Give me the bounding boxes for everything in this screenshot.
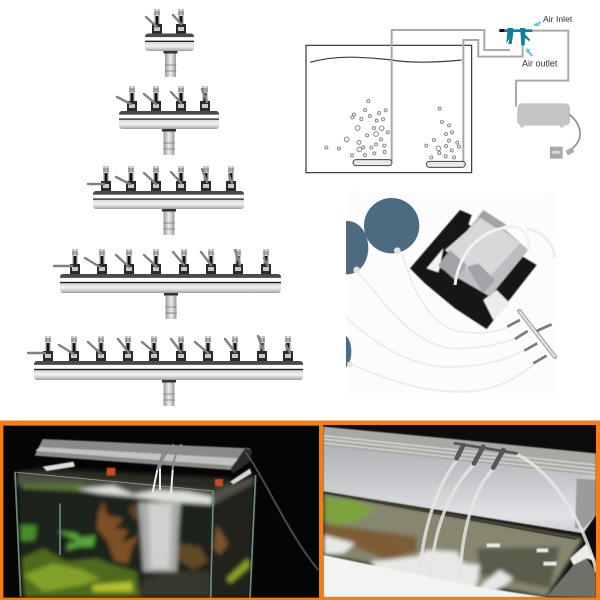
background bbox=[346, 192, 556, 395]
green algae patch bbox=[323, 497, 375, 527]
teal manifold bbox=[499, 28, 532, 45]
bottom orange band bbox=[0, 420, 600, 600]
black air line bbox=[245, 452, 318, 570]
label: Air outlet: Air outlet bbox=[522, 58, 558, 68]
manifold: 6-way valve bbox=[88, 166, 244, 235]
green surface reflection bbox=[20, 483, 83, 491]
metal valves bbox=[455, 443, 517, 468]
foam at surface bbox=[77, 486, 212, 504]
air stones bbox=[353, 160, 465, 167]
manifold: 8-way valve bbox=[54, 249, 281, 319]
bubble curtain bbox=[138, 502, 181, 572]
photo: aquarium with bubble curtain bbox=[3, 426, 319, 598]
pump body bbox=[438, 210, 528, 297]
tank rim surface bbox=[17, 472, 255, 504]
plants bbox=[57, 531, 95, 550]
white foam bbox=[323, 535, 513, 592]
brown reflection bbox=[323, 523, 417, 560]
driftwood bbox=[97, 501, 140, 563]
dark surface area bbox=[477, 547, 560, 588]
water surface bbox=[323, 492, 583, 597]
moss carpet bbox=[22, 548, 140, 598]
manifold: 2-way valve bbox=[145, 9, 194, 77]
air tubes bbox=[347, 228, 555, 392]
rail highlights bbox=[323, 436, 596, 473]
dark gear behind the lid bbox=[17, 468, 233, 491]
mini manifold bbox=[507, 311, 555, 363]
photo: close-up of valves on tank lid bbox=[323, 425, 597, 597]
bubbles bbox=[325, 99, 460, 159]
pump coil blocks bbox=[438, 210, 507, 293]
dark frame line bbox=[323, 492, 577, 539]
foam spots bbox=[487, 543, 557, 566]
tank back interior bbox=[17, 482, 213, 598]
stone connectors bbox=[347, 247, 401, 367]
diagram: aquarium air connection bbox=[306, 14, 580, 173]
light hood bbox=[35, 439, 251, 470]
manifold: 10-way valve bbox=[28, 336, 303, 406]
photo: air pump with stones and tubes bbox=[346, 198, 558, 393]
glass edges bbox=[15, 472, 256, 598]
power cord and socket bbox=[550, 114, 580, 159]
front tube loop bbox=[455, 227, 529, 285]
lamp tube bbox=[323, 446, 596, 533]
clear tubes bbox=[420, 454, 597, 578]
frame window right bbox=[483, 290, 510, 320]
glass front edge bbox=[323, 555, 547, 597]
air stones bbox=[346, 198, 420, 368]
frame window left bbox=[427, 248, 443, 272]
air tubes bbox=[392, 30, 568, 163]
tank outline bbox=[306, 45, 472, 173]
lamp rail bbox=[323, 427, 596, 478]
clear air tubes bbox=[157, 444, 182, 470]
arrows bbox=[526, 21, 541, 57]
hood mount details bbox=[43, 462, 75, 471]
air pump bbox=[517, 103, 570, 128]
water line bbox=[310, 57, 462, 62]
manifold: 4-way valve bbox=[117, 86, 219, 155]
tank corner bbox=[547, 558, 596, 597]
tank side bbox=[212, 478, 255, 598]
label: Air Inlet: Air Inlet bbox=[543, 14, 573, 24]
pump top highlight bbox=[445, 217, 520, 283]
lamp end cap bbox=[575, 478, 596, 528]
pump frame bbox=[410, 210, 537, 329]
